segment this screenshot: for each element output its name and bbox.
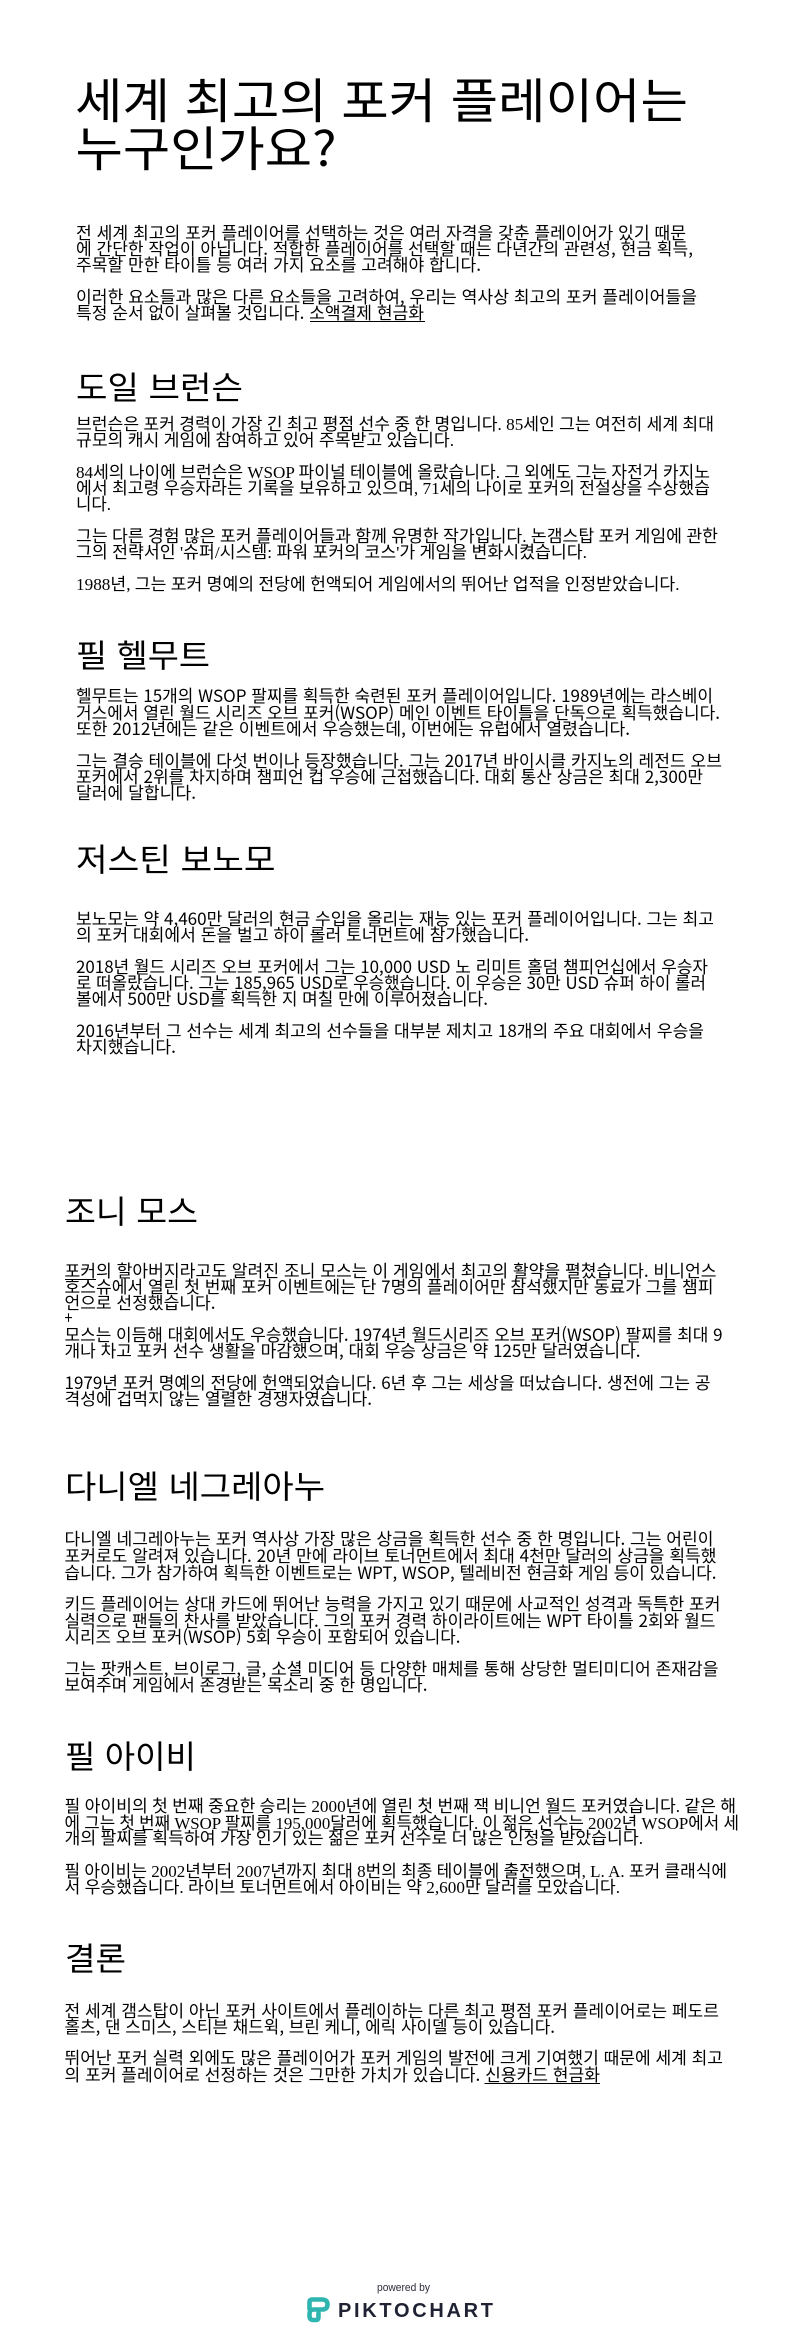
Negreanu paragraph 2: 실력으로 팬들의 찬사를 받았습니다. 그의 포커 경력 하이라이트에는 WPT 타이틀 2회와 월드 bbox=[64, 1607, 716, 1632]
Ivey paragraph 1 bbox=[64, 1797, 739, 1848]
Bonomo paragraph 2: 볼에서 500만 USD를 획득한 지 며칠 만에 이루어졌습니다. bbox=[76, 985, 488, 1010]
Brunson paragraph 1 bbox=[76, 415, 714, 450]
Hellmuth paragraph 1 bbox=[76, 682, 720, 740]
intro paragraph 2: 이러한 요소들과 많은 다른 요소들을 고려하여, 우리는 역사상 최고의 포커 플레이어들을 bbox=[76, 283, 697, 308]
Brunson paragraph 4: 1988년, 그는 포커 명예의 전당에 헌액되어 게임에서의 뛰어난 업적을 인정받았습니다. bbox=[76, 575, 680, 594]
Brunson paragraph 3: 그는 다른 경험 많은 포커 플레이어들과 함께 유명한 작가입니다. 논갬스탑 포커 게임에 관한 bbox=[76, 527, 718, 546]
Brunson paragraph 2 bbox=[76, 463, 710, 514]
Bonomo paragraph 2 bbox=[76, 953, 708, 1010]
Bonomo paragraph 1: 의 포커 대회에서 돈을 벌고 하이 롤러 토너먼트에 참가했습니다. bbox=[76, 921, 529, 946]
Ivey paragraph 1: 필 아이비의 첫 번째 중요한 승리는 2000년에 열린 첫 번째 잭 비니언 월드 포커였습니다. 같은 해 bbox=[64, 1797, 736, 1816]
intro paragraph 1: 에 간단한 작업이 아닙니다. 적합한 플레이어를 선택할 때는 다년간의 관련성, 현금 획득, bbox=[76, 235, 693, 260]
Moss paragraph 2: 격성에 겁먹지 않는 열렬한 경쟁자였습니다. bbox=[64, 1385, 372, 1410]
Moss paragraph 1 bbox=[64, 1257, 722, 1362]
conclusion paragraph 1: 전 세계 갬스탑이 아닌 포커 사이트에서 플레이하는 다른 최고 평점 포커 플레이어로는 페도르 bbox=[64, 1997, 719, 2022]
Negreanu paragraph 1: 다니엘 네그레아누는 포커 역사상 가장 많은 상금을 획득한 선수 중 한 명입니다. 그는 어린이 bbox=[64, 1525, 714, 1550]
Negreanu paragraph 3: 보여주며 게임에서 존경받는 목소리 중 한 명입니다. bbox=[64, 1671, 428, 1696]
Moss paragraph 1: 언으로 선정했습니다. bbox=[64, 1289, 216, 1314]
Negreanu paragraph 2 bbox=[64, 1590, 720, 1648]
Moss paragraph 2: 1979년 포커 명예의 전당에 헌액되었습니다. 6년 후 그는 세상을 떠났습니다. 생전에 그는 공 bbox=[64, 1369, 710, 1394]
Hellmuth paragraph 2 bbox=[76, 747, 722, 804]
title: 누구인가요? bbox=[76, 110, 336, 180]
Negreanu paragraph 1: 습니다. 그가 참가하여 획득한 이벤트로는 WPT, WSOP, 텔레비전 현금화 게임 등이 있습니다. bbox=[64, 1559, 716, 1584]
Hellmuth paragraph 2: 포커에서 2위를 차지하며 챔피언 컵 우승에 근접했습니다. 대회 통산 상금은 최대 2,300만 bbox=[76, 763, 703, 788]
heading: Justin Bonomo: 저스틴 보노모 bbox=[76, 835, 276, 881]
conclusion paragraph 2: 의 포커 플레이어로 선정하는 것은 그만한 가치가 있습니다. 신용카드 현금화 bbox=[64, 2061, 600, 2086]
heading: Phil Ivey: 필 아이비 bbox=[65, 1732, 196, 1778]
Moss paragraph 1: 포커의 할아버지라고도 알려진 조니 모스는 이 게임에서 최고의 활약을 펼쳤습니다. 비니언스 bbox=[64, 1257, 716, 1282]
Negreanu paragraph 2: 시리즈 오브 포커(WSOP) 5회 우승이 포함되어 있습니다. bbox=[64, 1623, 460, 1648]
Brunson paragraph 1: 브런슨은 포커 경력이 가장 긴 최고 평점 선수 중 한 명입니다. 85세인 그는 여전히 세계 최대 bbox=[76, 415, 714, 434]
icon: Piktochart mark bbox=[310, 2300, 328, 2320]
Bonomo paragraph 1: 보노모는 약 4,460만 달러의 현금 수입을 올리는 재능 있는 포커 플레이어입니다. 그는 최고 bbox=[76, 905, 714, 930]
intro paragraph 1: 전 세계 최고의 포커 플레이어를 선택하는 것은 여러 자격을 갖춘 플레이어가 있기 때문 bbox=[76, 219, 686, 244]
Hellmuth paragraph 1: 또한 2012년에는 같은 이벤트에서 우승했는데, 이번에는 유럽에서 열렸습니다. bbox=[76, 715, 630, 740]
footer logo: powered by Piktochart bbox=[310, 2282, 493, 2322]
Negreanu paragraph 3: 그는 팟캐스트, 브이로그, 글, 소셜 미디어 등 다양한 매체를 통해 상당한 멀티미디어 존재감을 bbox=[64, 1655, 718, 1680]
Negreanu paragraph 2: 키드 플레이어는 상대 카드에 뛰어난 능력을 가지고 있기 때문에 사교적인 성격과 독특한 포커 bbox=[64, 1590, 720, 1615]
Bonomo paragraph 3 bbox=[76, 1017, 704, 1058]
Moss paragraph 2 bbox=[64, 1369, 710, 1410]
Ivey paragraph 1: 에 그는 첫 번째 WSOP 팔찌를 195,000달러에 획득했습니다. 이 젊은 선수는 2002년 WSOP에서 세 bbox=[64, 1814, 739, 1833]
Brunson paragraph 2: 84세의 나이에 브런슨은 WSOP 파이널 테이블에 올랐습니다. 그 외에도 그는 자전거 카지노 bbox=[76, 463, 710, 482]
Hellmuth paragraph 1: 헬무트는 15개의 WSOP 팔찌를 획득한 숙련된 포커 플레이어입니다. 1989년에는 라스베이 bbox=[76, 682, 713, 707]
Negreanu paragraph 3 bbox=[64, 1655, 718, 1696]
heading: Doyle Brunson: 도일 브런슨 bbox=[76, 363, 243, 409]
Ivey paragraph 2: 필 아이비는 2002년부터 2007년까지 최대 8번의 최종 테이블에 출전했으며, L. A. 포커 클래식에 bbox=[64, 1862, 727, 1881]
Brunson paragraph 2: 니다. bbox=[76, 495, 111, 514]
heading: Conclusion: 결론 bbox=[65, 1934, 126, 1980]
footer logo: powered by Piktochart: powered by bbox=[377, 2282, 430, 2294]
Brunson paragraph 3 bbox=[76, 527, 718, 562]
Hellmuth paragraph 1: 거스에서 열린 월드 시리즈 오브 포커(WSOP) 메인 이벤트 타이틀을 단독으로 획득했습니다. bbox=[76, 699, 720, 724]
Brunson paragraph 3: 그의 전략서인 '슈퍼/시스템: 파워 포커의 코스'가 게임을 변화시켰습니다. bbox=[76, 543, 587, 562]
intro paragraph 1 bbox=[76, 219, 693, 276]
Bonomo paragraph 2: 2018년 월드 시리즈 오브 포커에서 그는 10,000 USD 노 리미트 홀덤 챔피언십에서 우승자 bbox=[76, 953, 708, 978]
conclusion paragraph 1: 홀츠, 댄 스미스, 스티븐 채드윅, 브린 케니, 에릭 사이델 등이 있습니다. bbox=[64, 2013, 555, 2038]
Moss paragraph 1: + bbox=[64, 1304, 72, 1329]
conclusion paragraph 1 bbox=[64, 1997, 719, 2038]
Bonomo paragraph 1 bbox=[76, 905, 714, 946]
Brunson paragraph 2: 에서 최고령 우승자라는 기록을 보유하고 있으며, 71세의 나이로 포커의 전설상을 수상했습 bbox=[76, 479, 710, 498]
Moss paragraph 1: 개나 차고 포커 선수 생활을 마감했으며, 대회 우승 상금은 약 125만 달러였습니다. bbox=[64, 1337, 640, 1362]
heading: Phil Hellmuth: 필 헬무트 bbox=[76, 631, 210, 677]
Bonomo paragraph 2: 로 떠올랐습니다. 그는 185,965 USD로 우승했습니다. 이 우승은 30만 USD 슈퍼 하이 롤러 bbox=[76, 969, 706, 994]
Moss paragraph 1: 호스슈에서 열린 첫 번째 포커 이벤트에는 단 7명의 플레이어만 참석했지만 동료가 그를 챔피 bbox=[64, 1273, 713, 1298]
Ivey paragraph 1: 개의 팔찌를 획득하여 가장 인기 있는 젊은 포커 선수로 더 많은 인정을 받았습니다. bbox=[64, 1829, 643, 1848]
conclusion paragraph 2: 뛰어난 포커 실력 외에도 많은 플레이어가 포커 게임의 발전에 크게 기여했기 때문에 세계 최고 bbox=[64, 2044, 723, 2069]
Bonomo paragraph 3: 차지했습니다. bbox=[76, 1033, 176, 1058]
intro paragraph 2 bbox=[76, 283, 697, 324]
title: 세계 최고의 포커 플레이어는 bbox=[75, 62, 688, 132]
title bbox=[75, 62, 688, 180]
conclusion paragraph 2 bbox=[64, 2044, 723, 2086]
Brunson paragraph 1: 규모의 캐시 게임에 참여하고 있어 주목받고 있습니다. bbox=[76, 431, 454, 450]
footer logo: powered by Piktochart: PIKTOCHART bbox=[338, 2300, 493, 2322]
Hellmuth paragraph 2: 달러에 달합니다. bbox=[76, 779, 196, 804]
Ivey paragraph 2: 서 우승했습니다. 라이브 토너먼트에서 아이비는 약 2,600만 달러를 모았습니다. bbox=[64, 1878, 620, 1897]
Negreanu paragraph 1 bbox=[64, 1525, 717, 1584]
Ivey paragraph 2 bbox=[64, 1862, 727, 1897]
heading: Daniel Negreanu: 다니엘 네그레아누 bbox=[65, 1462, 325, 1508]
Moss paragraph 1: 모스는 이듬해 대회에서도 우승했습니다. 1974년 월드시리즈 오브 포커(WSOP) 팔찌를 최대 9 bbox=[64, 1321, 722, 1346]
Hellmuth paragraph 2: 그는 결승 테이블에 다섯 번이나 등장했습니다. 그는 2017년 바이시클 카지노의 레전드 오브 bbox=[76, 747, 722, 772]
intro paragraph 2: 특정 순서 없이 살펴볼 것입니다. 소액결제 현금화 bbox=[76, 299, 424, 324]
Bonomo paragraph 3: 2016년부터 그 선수는 세계 최고의 선수들을 대부분 제치고 18개의 주요 대회에서 우승을 bbox=[76, 1017, 704, 1042]
heading: Johnny Moss: 조니 모스 bbox=[65, 1187, 198, 1233]
Negreanu paragraph 1: 포커로도 알려져 있습니다. 20년 만에 라이브 토너먼트에서 최대 4천만 달러의 상금을 획득했 bbox=[64, 1542, 717, 1567]
intro paragraph 1: 주목할 만한 타이틀 등 여러 가지 요소를 고려해야 합니다. bbox=[76, 251, 481, 276]
